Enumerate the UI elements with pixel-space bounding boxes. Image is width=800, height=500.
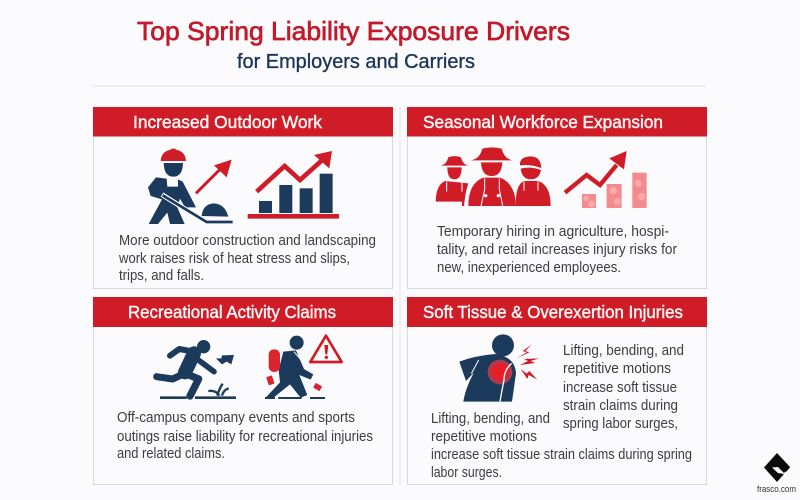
icon: red rising arrow	[196, 160, 232, 193]
title: Top Spring Liability Exposure Drivers	[137, 16, 570, 46]
logo: frasco.com	[757, 453, 796, 494]
title	[137, 16, 570, 73]
panel header	[407, 107, 707, 136]
icon: back pain figure	[459, 334, 539, 402]
panel text: right column: spring labor surges,	[563, 416, 678, 432]
icon: injured person with backpack and warning sign	[265, 336, 342, 398]
panel text: work raises risk of heat stress and slips,	[118, 251, 350, 267]
panel: soft tissue and overexertion injuries	[407, 297, 707, 484]
panel text: lower block: labor surges.	[431, 465, 502, 481]
panel header: Increased Outdoor Work	[133, 112, 322, 132]
panel text	[117, 410, 373, 462]
panel text: Off-campus company events and sports	[117, 410, 355, 426]
panel text: tality, and retail increases injury risks for	[437, 242, 677, 258]
panel text: right column: repetitive motions	[563, 361, 671, 377]
panel text	[118, 233, 376, 284]
panel text: right column: strain claims during	[563, 398, 678, 414]
panel header: Seasonal Workforce Expansion	[423, 112, 663, 132]
panel text: right column	[563, 343, 684, 432]
panel text: More outdoor construction and landscaping	[119, 233, 376, 249]
panel text: Temporary hiring in agriculture, hospi-	[437, 224, 669, 240]
icon: construction worker with shovel	[148, 149, 233, 224]
logo: frasco.com: frasco.com	[757, 484, 796, 494]
icon: running figure tripping	[157, 340, 236, 398]
icon: three seasonal workers	[436, 147, 551, 206]
panel text: and related claims.	[117, 446, 225, 462]
panel header: Recreational Activity Claims	[128, 302, 336, 322]
panel text: lower block: repetitive motions	[431, 429, 537, 445]
panel text: lower block: increase soft tissue strain claims during spring	[431, 447, 692, 463]
panel: recreational activity claims	[93, 297, 393, 484]
panel text	[437, 224, 677, 276]
icon: bar chart with trend arrow	[248, 151, 339, 219]
panel header: Soft Tissue & Overexertion Injuries	[423, 302, 683, 322]
panel text: trips, and falls.	[119, 268, 204, 284]
icon: rising trend over pink bars	[565, 151, 647, 208]
panel text: outings raise liability for recreational injuries	[117, 429, 373, 445]
panel: seasonal workforce expansion	[407, 107, 707, 288]
panel text: right column: increase soft tissue	[563, 380, 677, 396]
panel header	[93, 107, 393, 136]
panel text: right column: Lifting, bending, and	[563, 343, 684, 359]
panel header	[93, 297, 393, 327]
panel: increased outdoor work	[93, 107, 393, 288]
panel text: lower block	[431, 411, 692, 481]
panel header	[407, 297, 707, 327]
panel text: new, inexperienced employees.	[437, 260, 621, 276]
panel text: lower block: Lifting, bending, and	[431, 411, 550, 427]
subtitle: for Employers and Carriers	[237, 51, 475, 73]
